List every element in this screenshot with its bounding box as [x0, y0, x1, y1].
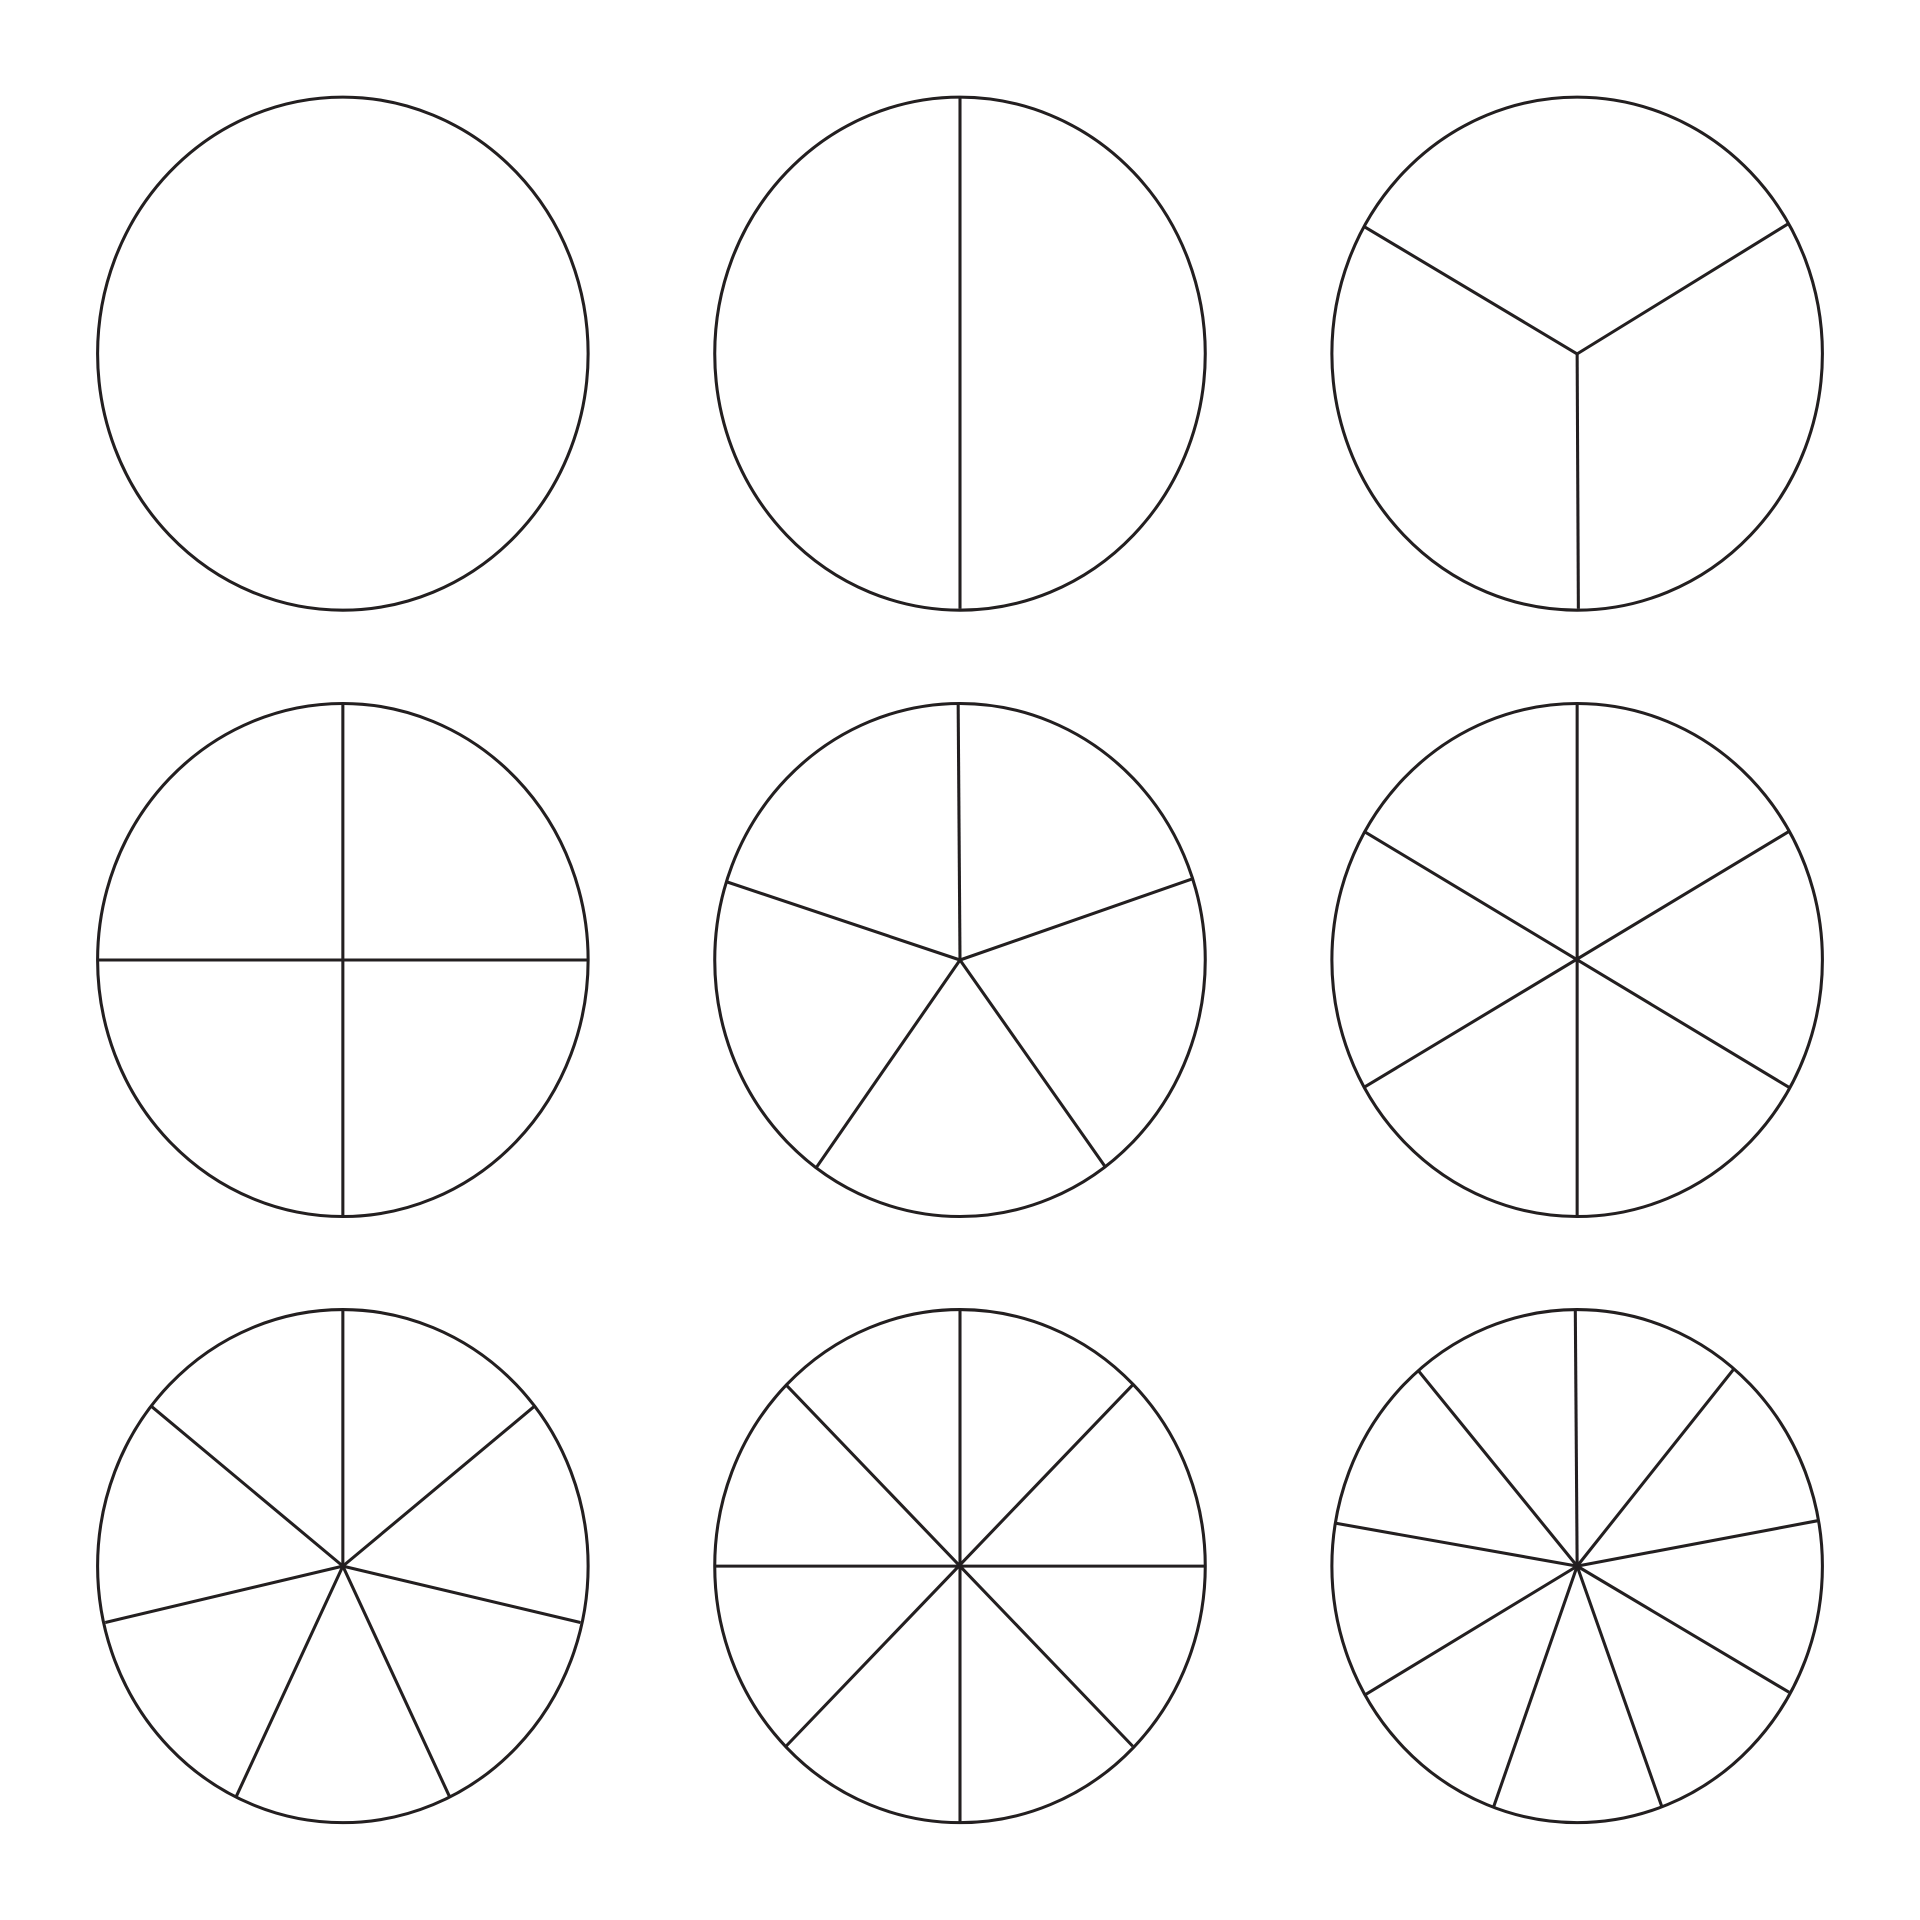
circle: two slices: [715, 97, 1205, 610]
circle: nine slices: [1332, 1310, 1822, 1823]
circle: four slices: [98, 703, 588, 1217]
circle: seven slices: [98, 1310, 588, 1823]
circle: six slices: [1332, 703, 1822, 1217]
circle: undivided: [98, 97, 588, 610]
circle: five slices: [715, 703, 1205, 1217]
circle: three slices: [1332, 97, 1822, 610]
circle: eight slices: [715, 1310, 1205, 1823]
